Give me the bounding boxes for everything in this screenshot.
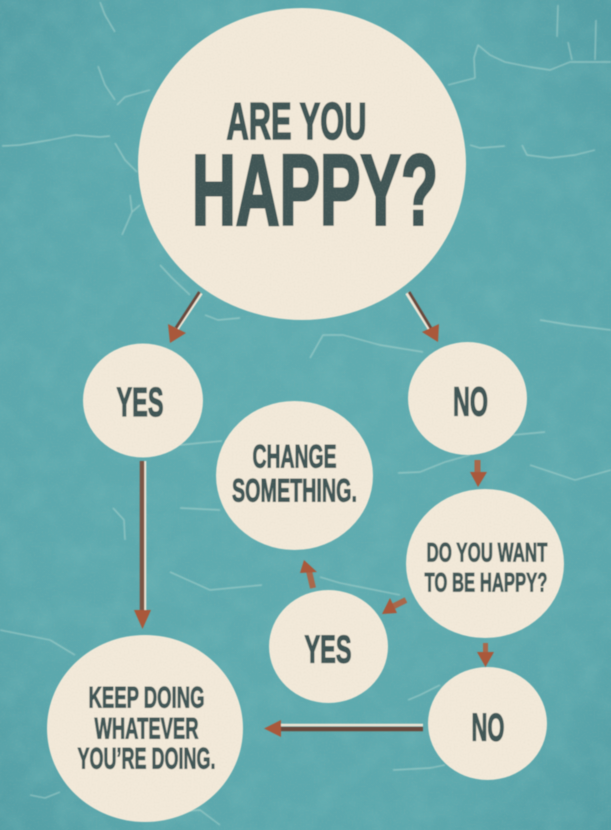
arrow: no to keep doing (264, 720, 423, 737)
circle: keep doing (47, 635, 243, 822)
arrow: yes to keep doing (134, 461, 151, 629)
circle: change something: CHANGE (252, 438, 336, 474)
circle: change something: SOMETHING. (232, 472, 357, 508)
heading: happy: HAPPY? (192, 134, 438, 246)
arrow: happy to no (407, 292, 439, 342)
circle: keep doing: WHATEVER (94, 712, 199, 746)
arrow: do you want to yes (382, 598, 406, 614)
arrow: happy to yes (168, 292, 201, 343)
circle: yes (83, 344, 203, 458)
arrow: do you want to no (477, 643, 494, 667)
circle: second yes (269, 590, 388, 703)
circle: no: NO (453, 378, 488, 424)
arrow: no to do you want (470, 460, 487, 487)
circle: yes: YES (116, 379, 164, 425)
circle: keep doing: YOU’RE DOING. (78, 742, 216, 776)
circle: no (408, 342, 527, 455)
circle: second no (428, 667, 547, 780)
circle: change something (216, 401, 373, 550)
heading: are you: ARE YOU (226, 93, 366, 151)
circle: are you happy (138, 8, 466, 320)
circle: second yes: YES (304, 628, 352, 672)
circle: keep doing: KEEP DOING (88, 682, 204, 714)
circle: do you want to be happy (406, 489, 564, 638)
arrow: yes to change (300, 560, 317, 588)
circle: second no: NO (472, 706, 504, 750)
